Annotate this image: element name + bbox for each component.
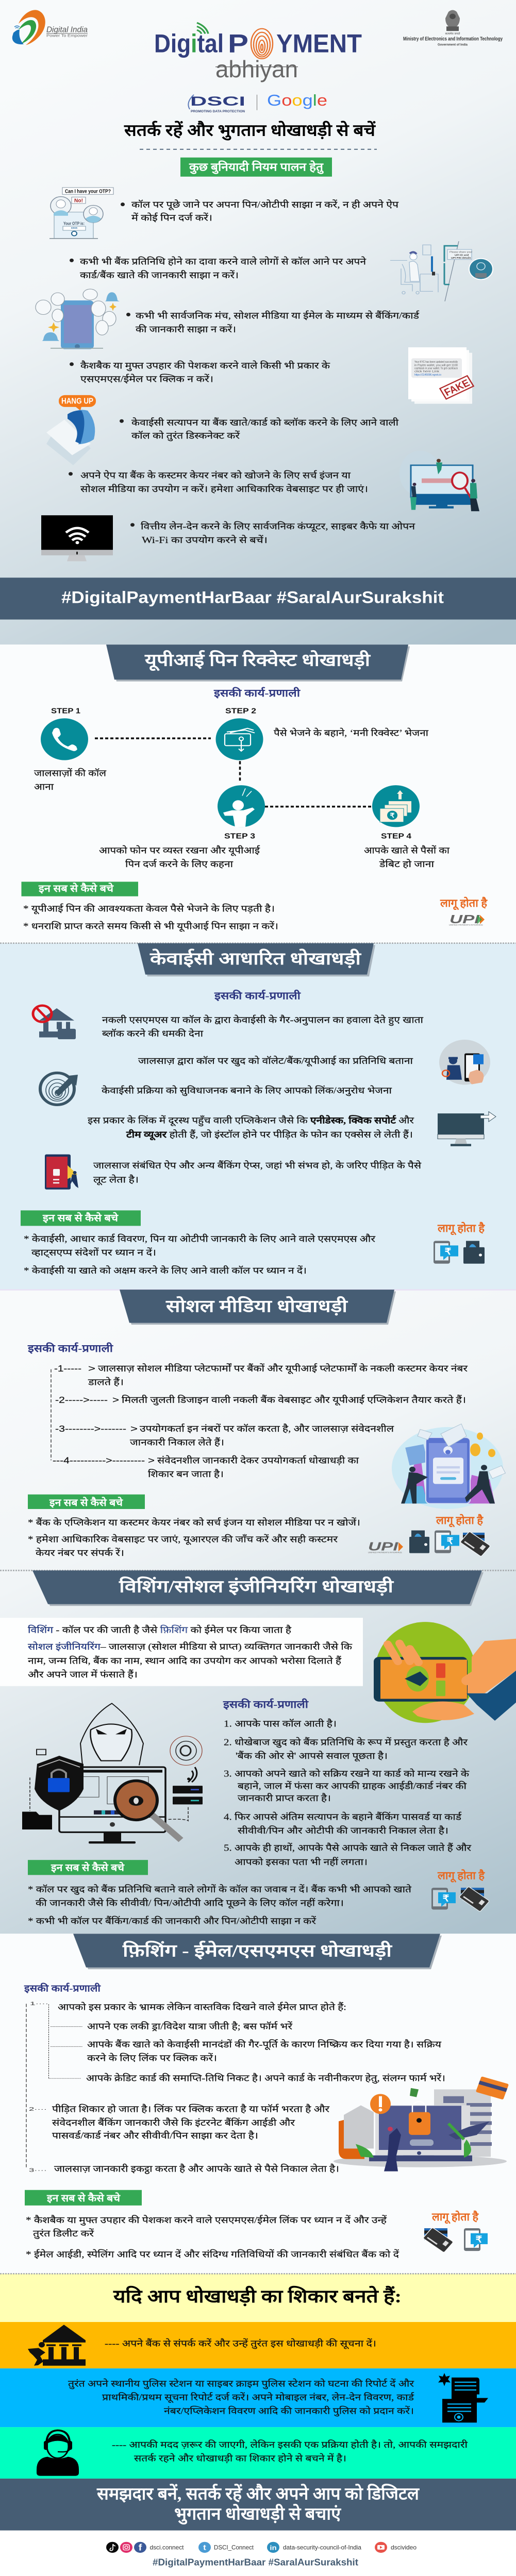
icon: support agent	[37, 2430, 79, 2476]
bullet 1	[121, 199, 398, 223]
tips: KYC: * केवाईसी या खाते को अक्षम करने के लिए आने वाली कॉल पर ध्यान न दें।	[24, 1265, 307, 1276]
bullet 4	[70, 361, 330, 384]
heading: KYC fraud: केवाईसी आधारित धोखाधड़ी	[149, 948, 362, 969]
steps: vishing: बहाने, जाल में फंसा कर आपकी ग्राहक आईडी/कार्ड नंबर की	[238, 1781, 467, 1791]
panel: definitions: सोशल इंजीनियरिंग – जालसाज़ (सोशल मीडिया से प्राप्त) व्यक्तिगत जानकारी जैसे कि	[28, 1641, 353, 1652]
panel: KYC fraud	[0, 943, 516, 1290]
social: twitter: t	[203, 2544, 207, 2552]
icon: monitor with wifi	[41, 515, 113, 561]
steps: vishing: सीवीवी/पिन और ओटीपी की जानकारी निकाल लेता है।	[238, 1825, 448, 1836]
tips: vishing	[28, 1884, 412, 1926]
step 3	[99, 785, 265, 870]
step: remote access apps: टीम व्यूअर होती हैं, जो इंस्टॉल होने पर पीड़ित के फोन का एक्सेस ले लेती हैं।	[126, 1129, 413, 1141]
icon: hang up	[46, 395, 96, 465]
illustration: hacker at monitor	[22, 1703, 203, 1843]
callout: how to stay safe: इन सब से कैसे बचे	[49, 1497, 123, 1508]
tips: phishing: तुरंत डिलीट करें	[33, 2228, 94, 2239]
band: help process: ---- आपकी मदद ज़रूर की जाएगी, लेकिन इसकी एक प्रक्रिया होती है। तो, आपकी समझदारी	[112, 2439, 468, 2450]
tips: social media: * हमेशा आधिकारिक वेबसाइट पर जाएं, यूआरएल की जाँच करें और सही कस्टमर	[28, 1534, 338, 1545]
subheading: how it works: इसकी कार्य-प्रणाली	[27, 1342, 114, 1354]
icon: fake SMS: click here Link	[414, 370, 439, 374]
arrow: step 2 to 3	[239, 761, 241, 782]
tips: social media: केयर नंबर पर संपर्क रें।	[36, 1548, 124, 1558]
title: सतर्क रहें और भुगतान धोखाधड़ी से बचें	[124, 121, 376, 141]
step: remote access apps	[88, 1115, 414, 1141]
steps: vishing: 3. आपको अपने खाते को सक्रिय रखने या कार्ड को मान्य रखने के	[224, 1769, 470, 1779]
step: fake representative: जालसाज़ द्वारा कॉल पर खुद को वॉलेट/बैंक/यूपीआई का प्रतिनिधि बताना	[138, 1056, 413, 1066]
social: twitter	[198, 2542, 254, 2553]
bullet 2	[70, 256, 367, 281]
applies to: UPI wallets cards	[368, 1514, 491, 1557]
icon: hang up: HANG UP	[61, 397, 93, 405]
callout: how to stay safe: इन सब से कैसे बचे	[46, 2192, 121, 2204]
step 2: पैसे भेजने के बहाने, ‘मनी रिक्वेस्ट’ भेजना	[274, 728, 429, 738]
panel: if you become a victim	[0, 2274, 516, 2531]
heading: vishing: विशिंग/सोशल इंजीनियरिंग धोखाधड़ी	[119, 1577, 394, 1596]
logo: Digital India: Digital India	[46, 25, 88, 34]
step: money stolen: जालसाज संबंधित ऐप और अन्य बैंकिंग ऐप्स, जहां भी संभव हो, के जरिए पीड़ित के पैसे	[93, 1160, 422, 1171]
bullet 7: Wi-Fi का उपयोग करने से बचें।	[142, 535, 268, 546]
applies to: wallets: ₹	[445, 1246, 451, 1257]
panel: definitions: विशिंग - कॉल पर की जाती है जैसे फ़िशिंग को ईमेल पर किया जाता है	[28, 1624, 292, 1635]
icon: bank with runner	[28, 2325, 86, 2366]
step 3: पिन दर्ज करने के लिए कहना	[125, 859, 234, 870]
steps: vishing: 5. आपके ही हाथों, आपके पैसे आपके खाते से निकल जाते हैं और	[224, 1843, 471, 1853]
heading: phishing: फ़िशिंग - ईमेल/एसएमएस धोखाधड़ी	[122, 1941, 393, 1960]
logo: Digital Payment Abhiyan: P	[228, 29, 248, 58]
bullet 5	[120, 417, 399, 442]
heading: basic rules: कुछ बुनियादी नियम पालन हेतु	[189, 160, 324, 174]
social: dsci.connect: dsci.connect	[149, 2544, 184, 2551]
flow: social media steps: -1-----	[54, 1363, 81, 1374]
step 4: STEP 4	[381, 832, 411, 840]
flow: phishing steps: पासवर्ड/कार्ड नंबर और सीवीवी/पिन साझा कर देता है।	[52, 2130, 258, 2141]
tips: vishing: * कभी भी कॉल पर बैंकिंग/कार्ड की जानकारी और पिन/ओटीपी साझा न करें	[28, 1916, 316, 1926]
applies to: cards and wallets: लागू होता है	[431, 2210, 479, 2224]
callout: how to stay safe: इन सब से कैसे बचे	[51, 1862, 125, 1873]
bullet 6: सोशल मीडिया का उपयोग न करें। हमेशा आधिकारिक वेबसाइट पर ही जाएं।	[80, 484, 368, 495]
flow: phishing steps	[26, 2001, 445, 2174]
logo: DSCI and Google: DSCI	[190, 94, 245, 109]
icon: fake SMS: Your KYC has been updated successfully	[414, 361, 458, 364]
band: report to police: नंबर/एप्लिकेशन विवरण आदि की जानकारी पुलिस को प्रदान करें।	[164, 2406, 414, 2417]
applies to: UPI wallets cards: लागू होता है	[436, 1514, 484, 1528]
panel: social media fraud	[0, 1289, 516, 1934]
applies to: wallets and cards	[431, 1869, 490, 1912]
tips: KYC: * केवाईसी, आधार कार्ड विवरण, पिन या ओटीपी जानकारी के लिए आने वाले एसएमएस और	[24, 1233, 375, 1244]
flow: social media steps: संवेदनशील जानकारी देकर उपयोगकर्ता धोखाधड़ी का	[157, 1455, 359, 1466]
flow: phishing steps: 3····	[29, 2168, 47, 2173]
steps: vishing: जानकारी प्राप्त करता है।	[238, 1793, 331, 1804]
flow: social media steps: मिलती जुलती डिजाइन वाली नकली बैंक वेबसाइट और यूपीआई एप्लिकेशन तैयार करते हैं।	[122, 1395, 466, 1406]
flow: social media steps: >	[148, 1455, 155, 1465]
icon: police report	[438, 2373, 488, 2422]
step 4: आपके खाते से पैसों का	[364, 845, 450, 856]
flow: phishing steps: आपके बैंक खाते को केवाईसी मानदंडों की गैर-पूर्ति के कारण निष्क्रिय कर दिया गया है। सक्रिय	[87, 2039, 442, 2050]
social: twitter: DSCI_Connect	[214, 2544, 254, 2551]
flow: social media steps: >	[112, 1395, 119, 1405]
heading: basic rules	[180, 158, 332, 177]
bullet 6	[69, 470, 368, 495]
bullet 6: अपने ऐप या बैंक के कस्टमर केयर नंबर को खोजने के लिए सर्च इंजन या	[80, 470, 351, 481]
logo: Ministry of Electronics and IT	[403, 10, 503, 46]
flow: phishing steps: आपके क्रेडिट कार्ड की समाप्ति-तिथि निकट है। अपने कार्ड के नवीनीकरण हेतु, संलग्न फार्म भरें।	[86, 2073, 445, 2084]
flow: social media steps: ---4---------->---------	[53, 1455, 145, 1465]
tips: UPI: * यूपीआई पिन की आवश्यकता केवल पैसे भेजने के लिए पड़ती है।	[23, 904, 275, 914]
flow: phishing steps: आपने एक लकी ड्रा/विदेश यात्रा जीती है; बस फॉर्म भरें	[87, 2021, 292, 2032]
bullet 2: कार्ड/बैंक खाते की जानकारी साझा न करें।	[80, 270, 239, 281]
bullet 7	[130, 521, 415, 546]
flow: social media steps: उपयोगकर्ता इन नंबरों पर कॉल करता है, और जालसाज़ संवेदनशील	[140, 1423, 394, 1434]
step 3: STEP 3	[224, 832, 255, 840]
heading: vishing	[32, 1570, 484, 1606]
icon: blocked bank	[33, 1006, 76, 1039]
bullet 5: कॉल को तुरंत डिस्कनेक्ट करें	[131, 431, 240, 442]
icon: fake SMS: https://1145096.ngrok.io	[414, 374, 441, 377]
tips: vishing: * कॉल पर खुद को बैंक प्रतिनिधि बताने वाले लोगों के कॉल का जवाब न दें। बैंक कभी भी आपको खाते	[28, 1884, 412, 1895]
callout: how to stay safe	[28, 1495, 145, 1509]
bullet 7: वित्तीय लेन-देन करने के लिए सार्वजनिक कंप्यूटर, साइबर कैफे या ओपन	[141, 521, 415, 532]
step: threat SMS: नकली एसएमएस या कॉल के द्वारा केवाईसी के गैर-अनुपालन का हवाला देते हुए खाता	[102, 1014, 424, 1026]
tips: UPI	[23, 904, 278, 932]
heading: UPI PIN request fraud: यूपीआई पिन रिक्वेस्ट धोखाधड़ी	[144, 650, 371, 671]
heading: social media fraud	[120, 1290, 396, 1325]
applies to: cards and wallets	[423, 2210, 488, 2253]
flow: social media steps: जानकारी निकाल लेते हैं।	[130, 1437, 224, 1448]
applies to: UPI wallets cards: ₹	[447, 1536, 453, 1546]
tips: phishing	[26, 2215, 400, 2260]
arrow: step 1 to 2	[95, 737, 211, 739]
step 2: STEP 2	[225, 706, 256, 715]
applies to: UPI wallets cards: UNIFIED PAYMENTS INTERFACE	[368, 1551, 402, 1554]
social: dsci.connect: f	[139, 2543, 142, 2552]
logo: Digital Payment Abhiyan: Digital	[154, 29, 224, 58]
icon: bank agent bubble: UPI ID and	[455, 254, 469, 257]
bullet 3	[126, 311, 420, 335]
subheading: how it works: इसकी कार्य-प्रणाली	[223, 1698, 309, 1710]
callout: how to stay safe	[28, 1860, 148, 1875]
flow: social media steps: शिकार बन जाता है।	[148, 1469, 224, 1480]
callout: how to stay safe	[22, 882, 138, 896]
band: help process	[0, 2427, 516, 2479]
heading: social media fraud: सोशल मीडिया धोखाधड़ी	[165, 1296, 348, 1316]
callout: how to stay safe: इन सब से कैसे बचे	[42, 1212, 119, 1224]
icon: fingerprint link	[40, 1073, 78, 1105]
tips: KYC	[24, 1233, 375, 1276]
tips: UPI: * धनराशि प्राप्त करते समय किसी से भी यूपीआई पिन साझा न करें।	[23, 921, 278, 932]
footer	[0, 2531, 516, 2576]
flow: social media steps: >	[130, 1423, 138, 1434]
icon: bank agent bubble: UPI PIN details	[451, 257, 471, 260]
subheading: how it works: इसकी कार्य-प्रणाली	[24, 1982, 101, 1994]
applies to: UPI: लागू होता है	[440, 896, 488, 910]
icon: social media phone	[36, 289, 120, 349]
band: report to police: प्राथमिकी/प्रथम सूचना रिपोर्ट दर्ज करें। अपने मोबाइल नंबर, लेन-देन विवरण, कार्ड	[102, 2392, 414, 2403]
logo: DSCI and Google: PROMOTING DATA PROTECTION	[191, 110, 245, 113]
heading: phishing	[73, 1934, 442, 1969]
icon: OTP chat: Your OTP is:	[63, 221, 85, 226]
icon: phone break-in	[45, 1155, 78, 1190]
callout: how to stay safe: इन सब से कैसे बचे	[38, 883, 114, 894]
steps: vishing: आपको इसका पता भी नहीं लगता।	[235, 1857, 368, 1868]
social: linkedin	[267, 2542, 362, 2553]
tips: phishing: * ईमेल आईडी, स्पेलिंग आदि पर ध्यान दें और संदिग्ध गतिविधियों की जानकारी संबंधित बैंक को दें	[26, 2249, 400, 2260]
icon: OTP chat: ****	[71, 227, 77, 231]
bullet 3: की जानकारी साझा न करें।	[136, 324, 236, 335]
steps: vishing	[224, 1718, 471, 1868]
bullet 3: कभी भी सार्वजनिक मंच, सोशल मीडिया या ईमेल के माध्यम से बैंकिंग/कार्ड	[136, 311, 420, 321]
band: help process: सतर्क रहने और धोखाधड़ी का शिकार होने से बचने में है।	[134, 2453, 346, 2464]
bullet 4: कैशबैक या मुफ्त उपहार की पेशकश करने वाले किसी भी प्रकार के	[80, 361, 330, 371]
logo: Ministry of Electronics and IT: Government of India	[438, 43, 468, 46]
icon: fake SMS: cashback in your wallet. To get cashback	[414, 367, 458, 370]
step 4: ₹	[390, 812, 395, 819]
band: report to police	[0, 2368, 516, 2427]
steps: vishing: 1. आपके पास कॉल आती है।	[224, 1718, 337, 1729]
flow: social media steps	[51, 1363, 468, 1480]
flow: phishing steps: पीड़ित शिकार हो जाता है। लिंक पर क्लिक करता है या फॉर्म भरता है और	[52, 2104, 329, 2114]
bullet 2: कभी भी बैंक प्रतिनिधि होने का दावा करने वाले लोगों से कॉल आने पर अपने	[80, 256, 367, 267]
footer hashtags: #DigitalPaymentHarBaar #SaralAurSurakshit	[153, 2557, 358, 2568]
steps: vishing: 'बैंक की ओर से' आपसे सवाल पूछता है।	[236, 1751, 388, 1762]
step: threat SMS: ब्लॉक करने की धमकी देना	[102, 1028, 204, 1039]
step 1: STEP 1	[51, 706, 80, 715]
icon: search on monitor	[400, 451, 479, 511]
flow: social media steps: जालसाज़ सोशल मीडिया प्लेटफार्मों पर बैंकों और यूपीआई प्लेटफार्मों के नकली कस्टमर केयर नंबर	[98, 1363, 468, 1375]
applies to: UPI: UNIFIED PAYMENTS INTERFACE	[449, 924, 483, 926]
banner: hashtags	[0, 578, 516, 620]
heading: KYC fraud	[138, 943, 375, 976]
logo: Ministry of Electronics and IT: सत्यमेव जयते	[445, 32, 460, 36]
tips: social media: * बैंक के एप्लिकेशन या कस्टमर केयर नंबर को सर्च इंजन या सोशल मीडिया पर न खोजें।	[28, 1517, 360, 1528]
illustration: fake customer care app	[392, 1424, 505, 1509]
callout: how to stay safe	[25, 2190, 142, 2206]
banner: hashtags: #DigitalPaymentHarBaar #SaralAurSurakshit	[61, 588, 444, 607]
icon: OTP chat: No!	[74, 198, 83, 204]
panel: definitions: और अपने जाल में फंसाते हैं।	[28, 1669, 138, 1680]
applies to: UPI	[440, 896, 488, 926]
tips: phishing: * कैशबैक या मुफ्त उपहार की पेशकश करने वाले एसएमएस/ईमेल लिंक पर ध्यान न दें और उन्हें	[26, 2215, 387, 2226]
steps: vishing: 4. फिर आपसे अंतिम सत्यापन के बहाने बैंकिंग पासवर्ड या कार्ड	[224, 1812, 462, 1822]
step: money stolen: लूट लेता है।	[93, 1175, 139, 1185]
tips: vishing: की जानकारी जैसे कि सीवीवी/ पिन/ओटीपी आदि पूछने के लिए कॉल नहीं करेगा।	[36, 1897, 344, 1909]
logo: DSCI and Google: Google	[267, 91, 327, 109]
icon: fake SMS: FAKE	[442, 377, 472, 398]
step: remote access apps: इस प्रकार के लिंक में दूरस्थ पहुँच वाली एप्लिकेशन जैसे कि एनीडेस्क, क्विक सपोर्ट और	[88, 1115, 414, 1126]
applies to: UPI: UPI	[450, 913, 480, 926]
logo: Digital India	[12, 10, 88, 45]
panel: definitions	[0, 1618, 363, 1686]
panel: definitions: नाम, जन्म तिथि, बैंक का नाम, स्थान आदि का उपयोग कर आपको भरोसा दिलाते हैं	[28, 1655, 342, 1666]
icon: bank agent bubble	[450, 251, 493, 279]
icon: fake SMS: in Paytm wallet, you will get 1100	[414, 364, 458, 367]
panel: phishing fraud	[0, 1934, 516, 2274]
flow: phishing steps: संवेदनशील बैंकिंग जानकारी जैसे कि इंटरनेट बैंकिंग आईडी और	[52, 2117, 295, 2128]
bullet 1: में कोई पिन दर्ज करें।	[131, 213, 212, 223]
panel: vishing and social engineering fraud	[0, 1570, 516, 1926]
flow: phishing steps: आपको इस प्रकार के भ्रामक लेकिन वास्तविक दिखने वाले ईमेल प्राप्त होते हैं:	[58, 2002, 346, 2012]
applies to: UPI wallets cards: UPI	[368, 1540, 399, 1553]
flow: phishing steps: 1····	[30, 2001, 48, 2006]
icon: OTP chat	[49, 188, 113, 239]
applies to: wallets and cards: लागू होता है	[437, 1869, 485, 1883]
logo: Digital Payment Abhiyan: YMENT	[276, 29, 362, 58]
icon: remote monitor	[438, 1112, 496, 1146]
icon: caller at desk	[390, 241, 472, 301]
logo: Digital Payment Abhiyan: abhiyan	[215, 57, 298, 83]
band: report to police: तुरंत अपने स्थानीय पुलिस स्टेशन या साइबर क्राइम पुलिस स्टेशन को घटना की रिपोर्ट दें और	[68, 2379, 414, 2389]
logo: Digital Payment Abhiyan	[154, 23, 362, 83]
illustration: hand with phone call	[374, 1622, 516, 1723]
social: dsci.connect	[106, 2542, 184, 2553]
band: closing message: समझदार बनें, सतर्क रहें और अपने आप को डिजिटल	[96, 2484, 420, 2503]
social: linkedin: data-security-council-of-India	[283, 2544, 362, 2551]
steps: vishing: 2. धोखेबाज खुद को बैंक प्रतिनिधि के रूप में प्रस्तुत करता है और	[224, 1737, 468, 1748]
panel: UPI PIN request fraud	[0, 645, 516, 943]
tips: KYC: व्हाट्सएप्प संदेशों पर ध्यान न दें।	[31, 1247, 156, 1258]
arrow: step 3 to 4	[265, 806, 372, 808]
step 1: जालसाज़ों की कॉल	[34, 768, 107, 778]
step: money stolen	[93, 1160, 422, 1185]
applies to: cards and wallets: ₹	[476, 2234, 482, 2244]
flow: phishing steps: 2····	[29, 2107, 47, 2112]
applies to: wallets	[434, 1222, 485, 1264]
band: closing message: भुगतान धोखाधड़ी से बचाएं	[174, 2504, 341, 2525]
heading: UPI PIN request fraud	[106, 645, 410, 682]
social: youtube: dscivideo	[391, 2544, 417, 2551]
flow: social media steps: -2----->-----	[55, 1395, 108, 1405]
subheading: how it works: इसकी कार्य-प्रणाली	[213, 687, 301, 699]
flow: social media steps: >	[88, 1363, 95, 1374]
step 2	[215, 706, 429, 760]
subheading: how it works: इसकी कार्य-प्रणाली	[214, 990, 302, 1002]
step 1	[34, 706, 107, 792]
illustration: stolen account	[334, 2076, 509, 2172]
flow: social media steps: डालते हैं।	[88, 1377, 124, 1387]
social: youtube	[375, 2542, 417, 2553]
social: linkedin: in	[270, 2544, 277, 2551]
flow: phishing steps: करने के लिए लिंक पर क्लिक करें।	[87, 2053, 217, 2063]
band: contact bank: ---- अपने बैंक से संपर्क करें और उन्हें तुरंत इस धोखाधड़ी की सूचना दें।	[105, 2338, 376, 2349]
band: contact bank	[0, 2322, 516, 2368]
step 3: आपको फोन पर व्यस्त रखना और यूपीआई	[99, 845, 260, 856]
step 1: आना	[34, 782, 54, 792]
logo: Digital India: Power To Empower	[46, 33, 88, 38]
applies to: wallets: लागू होता है	[437, 1222, 485, 1235]
icon: fraudster on phone	[439, 1040, 490, 1084]
bullet 4: एसएमएस/ईमेल पर क्लिक न करें।	[80, 374, 213, 384]
flow: phishing steps: जालसाज़ जानकारी इकट्ठा करता है और आपके खाते से पैसे निकाल लेता है।	[54, 2163, 339, 2174]
tips: social media	[28, 1517, 360, 1558]
icon: fake SMS	[408, 347, 474, 404]
step 4	[364, 785, 450, 870]
heading: victim: यदि आप धोखाधड़ी का शिकार बनते हैं:	[113, 2285, 402, 2307]
bullet 1: कॉल पर पूछे जाने पर अपना पिन/ओटीपी साझा न करें, न ही अपने ऐप	[131, 199, 398, 211]
band: closing message	[0, 2479, 516, 2531]
logo: DSCI and Google	[188, 91, 327, 113]
background: intro panel	[0, 0, 516, 645]
flow: social media steps: -3-------->-------	[55, 1423, 126, 1434]
step: link request: केवाईसी प्रक्रिया को सुविधाजनक बनाने के लिए आपको लिंक/अनुरोध भेजना	[102, 1085, 392, 1096]
step: threat SMS	[102, 1014, 424, 1039]
icon: OTP chat: Can I have your OTP?	[65, 189, 111, 194]
step 4: डेबिट हो जाना	[379, 859, 435, 870]
bullet 5: केवाईसी सत्यापन या बैंक खाते/कार्ड को ब्लॉक करने के लिए आने वाली	[131, 417, 399, 428]
applies to: wallets and cards: ₹	[443, 1893, 449, 1903]
icon: bank agent bubble: Please share your	[450, 251, 472, 253]
callout: how to stay safe	[21, 1210, 141, 1226]
